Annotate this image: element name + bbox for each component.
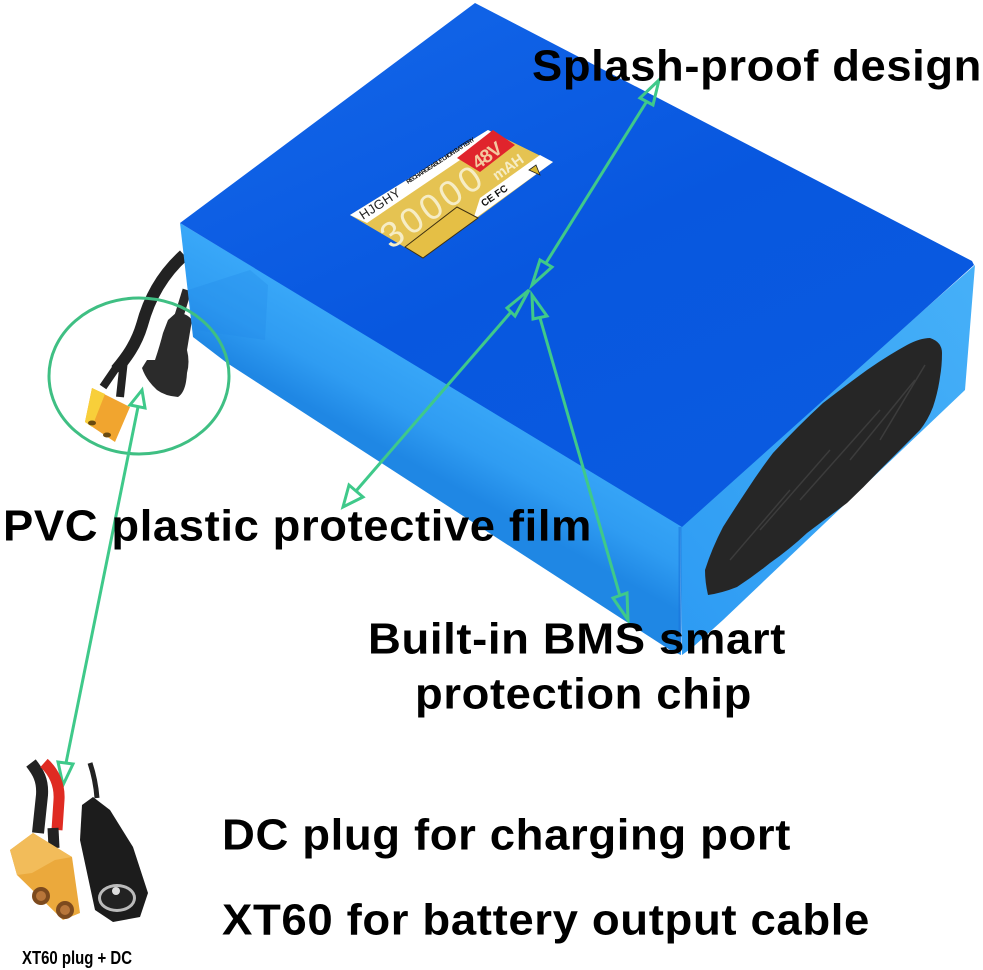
arrow: PVC film xyxy=(343,290,529,507)
arrow: splash-proof xyxy=(532,80,659,285)
label on battery: CE FC xyxy=(479,183,510,209)
heading: Splash-proof design: Splash-proof design xyxy=(532,42,982,90)
heading: XT60 for battery output cable: XT60 for battery output cable xyxy=(222,896,870,944)
heading: Built-in BMS smart protection chip: Built-in BMS smart xyxy=(368,614,786,664)
arrow: cable to connector photo xyxy=(58,390,145,785)
icon: battery cables xyxy=(85,255,192,442)
red 48V badge xyxy=(457,130,515,172)
battery: top face xyxy=(180,3,974,527)
icon: black potting on battery end xyxy=(705,338,942,595)
arrow: BMS chip xyxy=(532,295,628,620)
label on battery: 30000 xyxy=(372,157,490,257)
label on battery: RECHARGEABLE LI-ION BATTERY xyxy=(406,137,476,186)
caption: XT60 plug + DC: XT60 plug + DC xyxy=(22,948,132,968)
ellipse: callout around connectors xyxy=(49,298,229,454)
heading: PVC plastic protective film: PVC plastic protective film xyxy=(3,502,592,550)
label on battery xyxy=(350,130,553,258)
battery: front side face xyxy=(180,223,681,655)
heading: Built-in BMS smart protection chip: protection chip xyxy=(415,670,752,718)
icon: DC plug photo xyxy=(80,763,148,922)
battery: end face xyxy=(680,265,975,655)
label on battery: HJGHY xyxy=(356,185,403,223)
label on battery: mAH xyxy=(490,151,527,184)
heading: DC plug for charging port: DC plug for charging port xyxy=(222,810,791,860)
label on battery: 48V xyxy=(469,138,507,174)
battery: vertical seam between faces xyxy=(678,527,682,650)
battery: front face highlights xyxy=(188,270,268,340)
heading: Built-in BMS smart protection chip xyxy=(368,614,786,718)
icon: XT60 plug photo xyxy=(10,763,80,920)
